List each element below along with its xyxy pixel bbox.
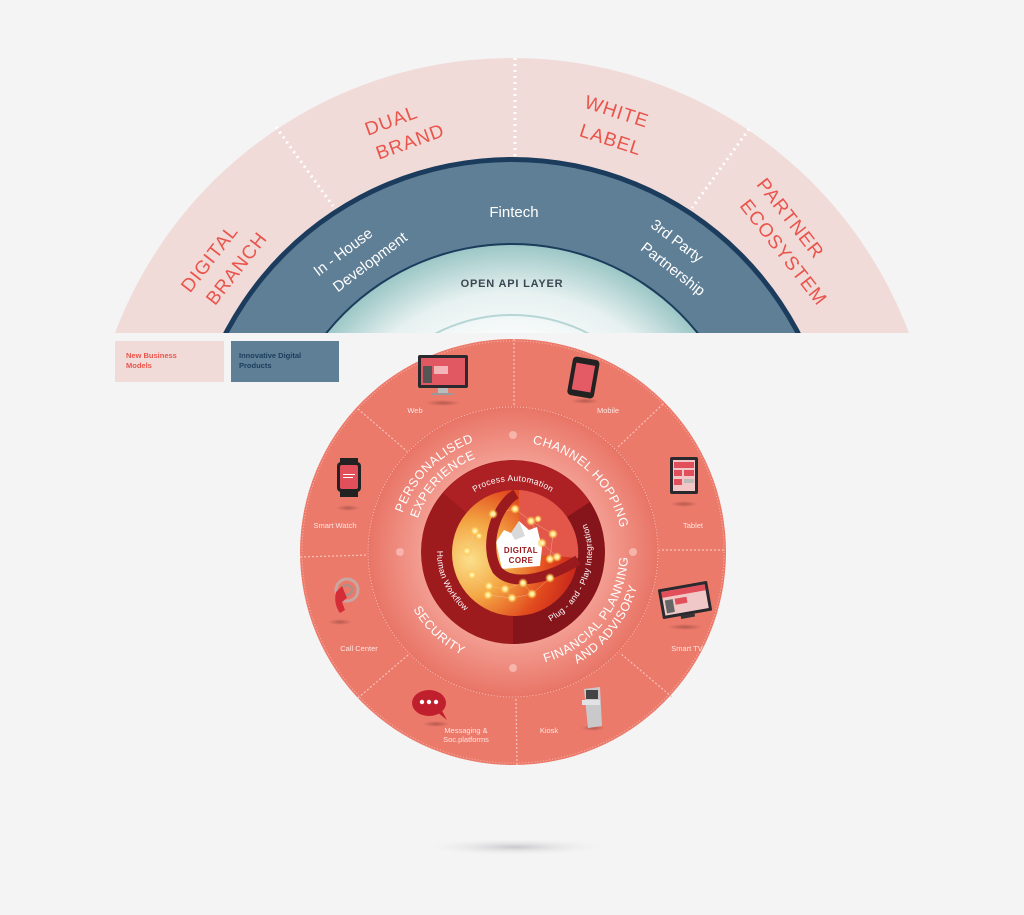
label: 3rd party partnership: Partnership — [637, 239, 708, 300]
top half-ring diagram — [115, 58, 909, 333]
label: kiosk: Kiosk — [540, 726, 558, 735]
band: innovative digital products — [223, 157, 801, 333]
label: smart watch: Smart Watch — [313, 521, 357, 530]
icon: smart watch — [336, 458, 361, 511]
middle ring labels: CHANNEL HOPPING — [534, 436, 628, 527]
digital core sphere: CORE — [509, 556, 534, 565]
label: white label — [577, 92, 651, 160]
inner ring labels: Process Automation — [472, 475, 553, 492]
icon: call center — [328, 579, 358, 625]
digital core sphere — [452, 490, 578, 616]
legend: innovative digital products: Innovative Digital — [239, 351, 301, 360]
icon: web monitor — [418, 355, 468, 406]
icon: tablet — [670, 457, 698, 507]
label: digital branch — [177, 221, 272, 309]
floor shadow — [420, 838, 610, 856]
label: in-house development: In - House — [311, 225, 376, 280]
label: 3rd party partnership: 3rd Party — [647, 216, 707, 267]
label: dual brand: BRAND — [373, 120, 448, 165]
label: open api layer: OPEN API LAYER — [461, 278, 563, 290]
middle ring labels: AND ADVISORY — [576, 584, 636, 664]
icon: kiosk — [581, 687, 605, 731]
icon: smart tv — [658, 581, 713, 630]
label: smart tv: Smart TV — [671, 644, 703, 653]
channel wheel — [300, 339, 726, 765]
digital core sphere: DIGITAL — [504, 546, 538, 555]
label: mobile: Mobile — [597, 406, 619, 415]
label: messaging & soc.platforms — [443, 726, 489, 744]
middle ring — [367, 406, 659, 698]
legend: innovative digital products: Products — [239, 361, 272, 370]
label: in-house development: Development — [330, 229, 411, 296]
label: fintech: Fintech — [489, 204, 539, 221]
label: white label: LABEL — [577, 121, 644, 160]
icon: mobile — [567, 356, 600, 404]
icon: messaging bubble — [412, 690, 450, 727]
band: new business models — [115, 58, 909, 333]
label: messaging & soc.platforms: Soc.platforms — [443, 735, 489, 744]
label: dual brand — [362, 102, 448, 165]
inner ring labels — [437, 475, 594, 622]
label: digital branch: DIGITAL — [177, 221, 243, 297]
label: web: Web — [407, 406, 423, 415]
middle ring labels: SECURITY — [414, 606, 466, 654]
legend: new business models: Models — [126, 361, 152, 370]
middle ring labels: EXPERIENCE — [410, 450, 475, 518]
label: messaging & soc.platforms: Messaging & — [444, 726, 488, 735]
middle ring labels: FINANCIAL PLANNING — [543, 558, 628, 662]
legend: new business models: New Business — [126, 351, 177, 360]
open api layer — [328, 245, 696, 333]
inner ring labels: Human Workflow — [437, 551, 468, 610]
label: call center: Call Center — [340, 644, 378, 653]
legend: innovative digital products — [231, 341, 339, 382]
label: tablet: Tablet — [683, 521, 704, 530]
middle ring labels — [394, 435, 636, 664]
label: partner ecosystem: PARTNER — [752, 175, 828, 263]
inner dark ring — [421, 460, 605, 644]
label: dual brand: DUAL — [362, 102, 421, 141]
outer ring: channels — [300, 339, 726, 765]
legend: new business models — [115, 341, 224, 382]
middle ring labels: PERSONALISED — [394, 435, 472, 512]
inner ring labels: Plug - and - Play Integration — [548, 524, 594, 622]
label: partner ecosystem: ECOSYSTEM — [735, 196, 831, 310]
dotted dividers — [276, 58, 749, 208]
label: digital branch: BRANCH — [202, 228, 272, 309]
label: white label: WHITE — [582, 92, 651, 133]
